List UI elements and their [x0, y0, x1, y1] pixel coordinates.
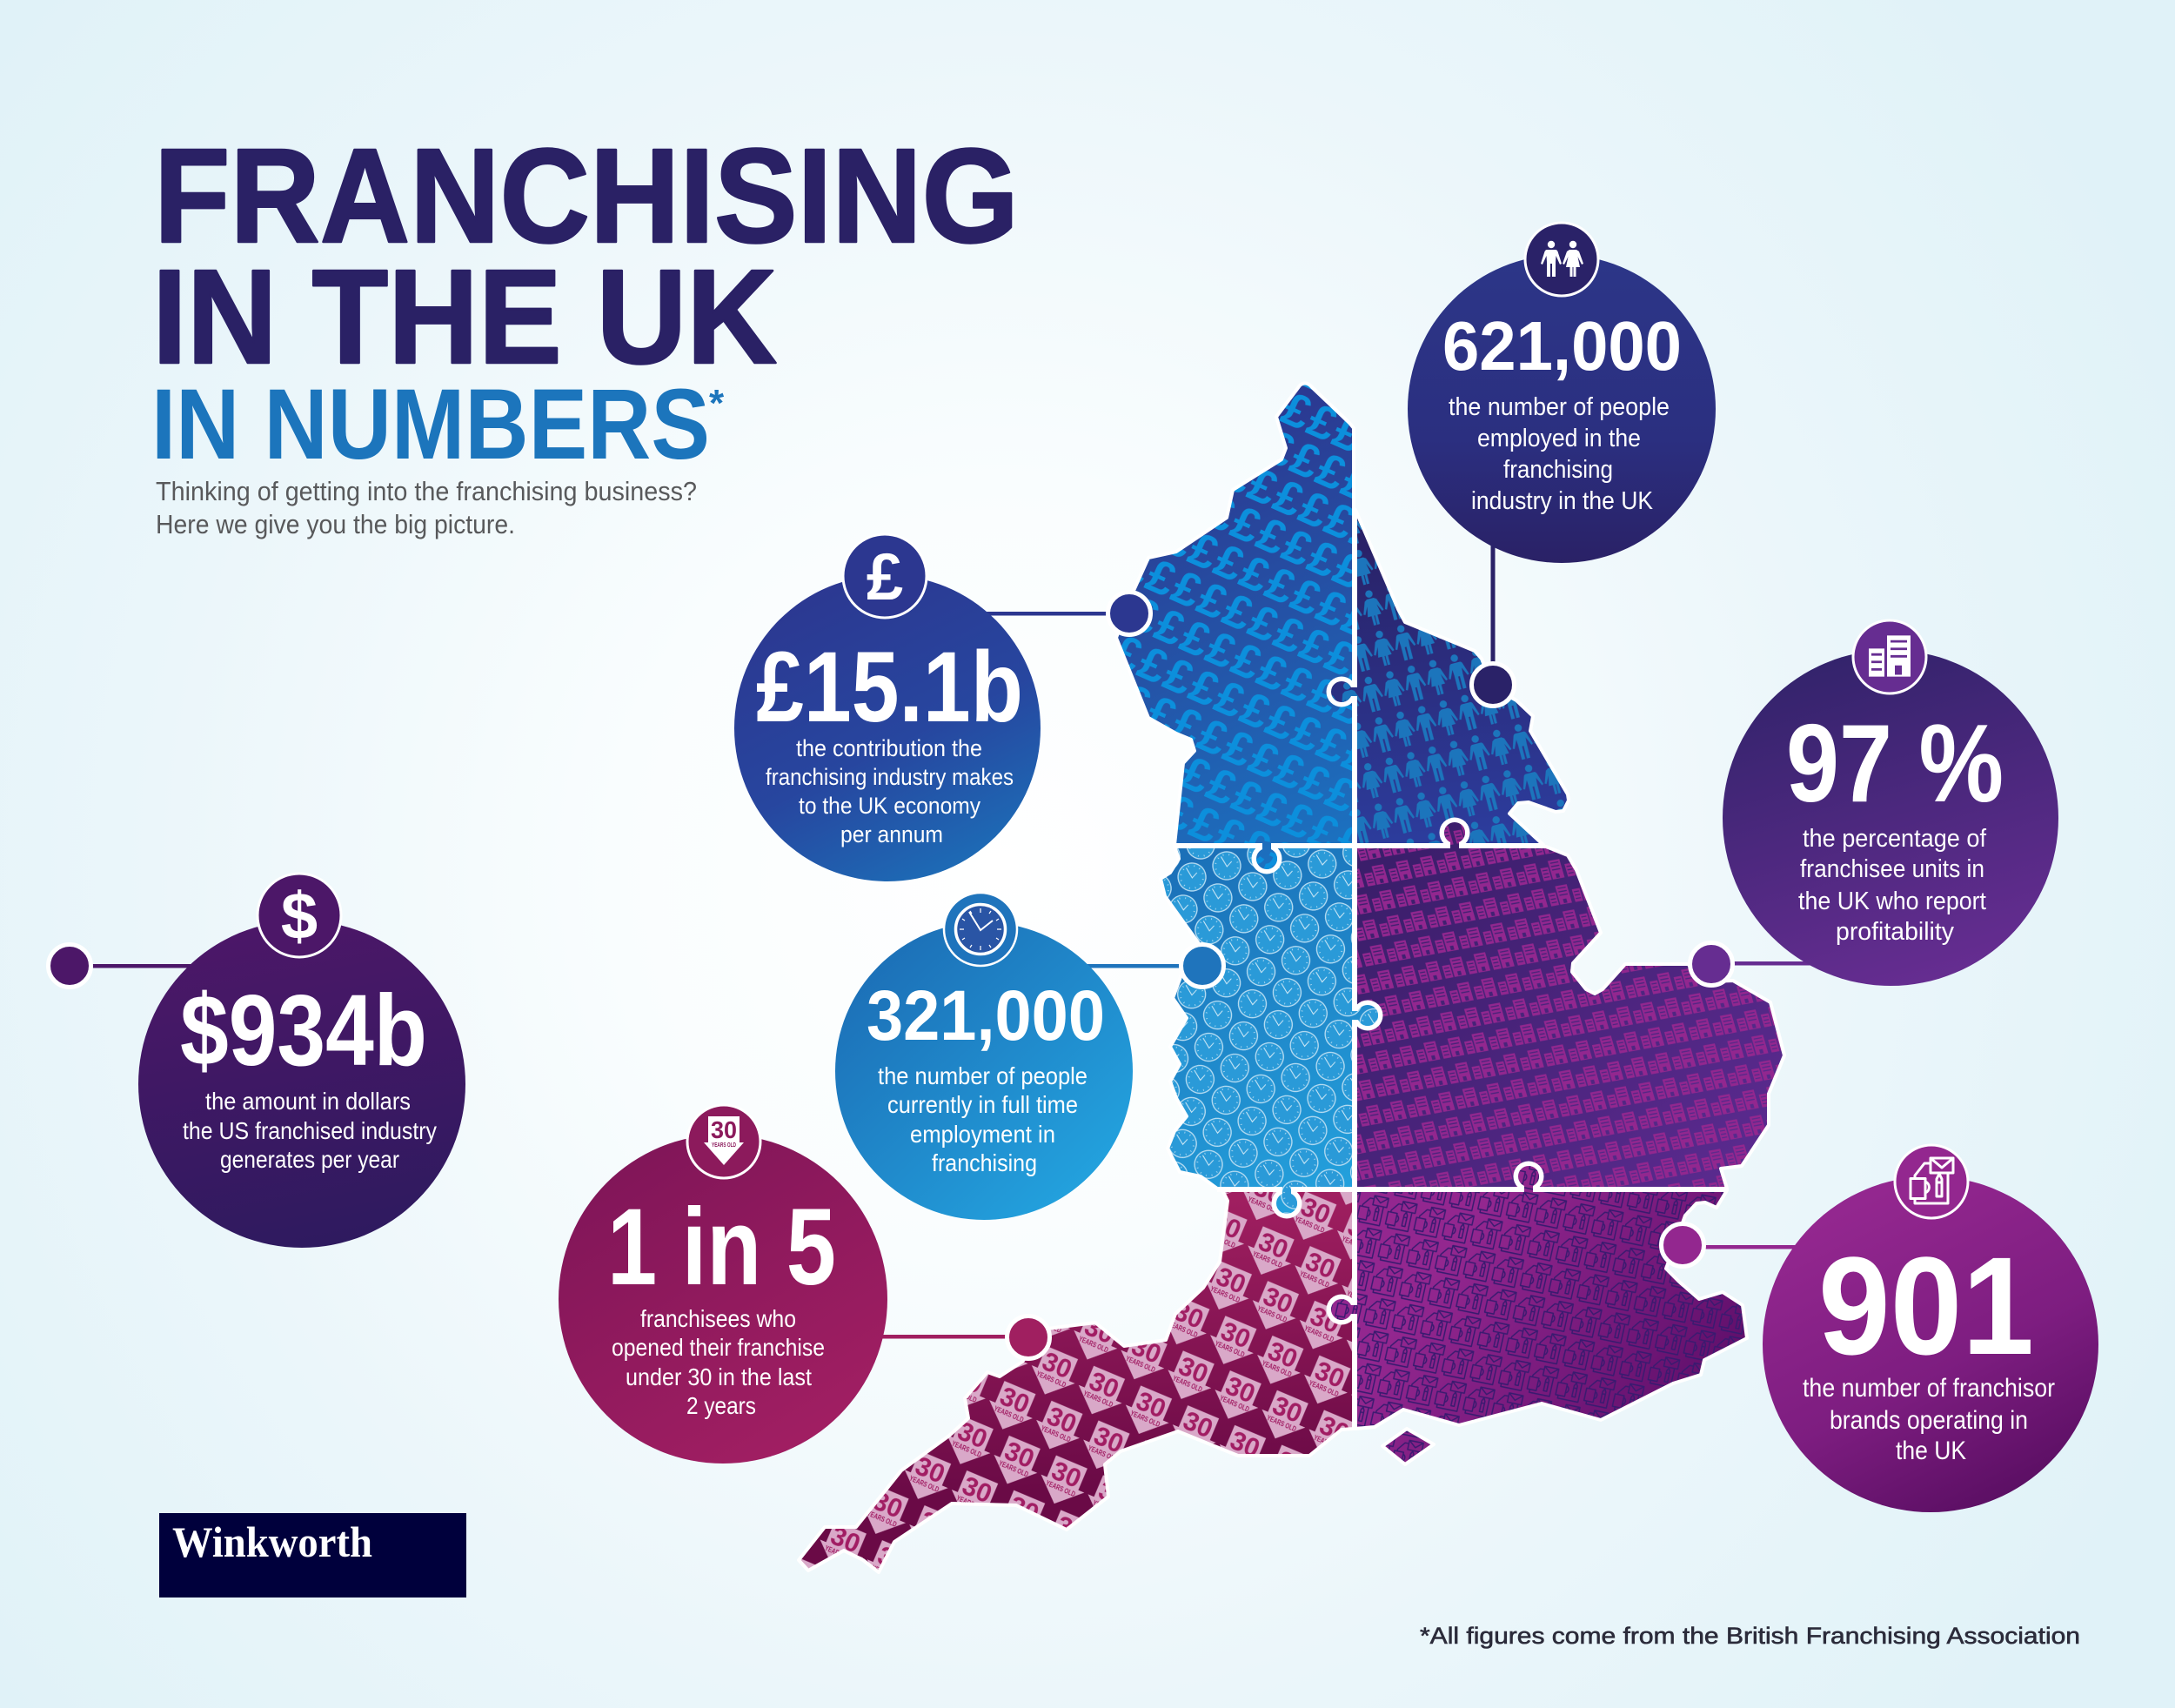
panel: £15.1b: [734, 534, 1041, 881]
logo: Winkworth: [159, 1513, 466, 1597]
intro text: Here we give you the big picture.: [156, 509, 515, 539]
icon: office supplies: [1895, 1145, 1968, 1218]
description: the percentage of: [1803, 825, 1987, 853]
description: franchising: [932, 1149, 1037, 1176]
description: the number of people: [1449, 393, 1670, 421]
description: [1803, 1374, 2055, 1465]
icon: clock: [944, 893, 1017, 966]
intro text: Thinking of getting into the franchising business?: [156, 476, 697, 506]
description: [766, 735, 1014, 847]
description: brands operating in: [1830, 1406, 2028, 1435]
description: franchising: [1503, 456, 1613, 484]
description: the UK who report: [1798, 887, 1986, 915]
map piece: north east, people: [1355, 510, 1569, 845]
description: the amount in dollars: [205, 1088, 411, 1115]
connector: 621,000: [1472, 539, 1514, 707]
panel: 1 in 5: [559, 1105, 887, 1464]
figure: 901: [1818, 1228, 2034, 1383]
icon: pound: £: [867, 540, 903, 614]
description: [878, 1062, 1088, 1176]
connector: 901: [1662, 1223, 1813, 1267]
icon: people: [1525, 223, 1598, 296]
icon: 30 years old arrow: 30: [711, 1116, 737, 1143]
description: [612, 1305, 825, 1419]
description: currently in full time: [887, 1091, 1078, 1118]
description: generates per year: [220, 1146, 399, 1173]
figure: $934b: [180, 974, 427, 1087]
description: the number of franchisor: [1803, 1374, 2055, 1403]
subtitle: in numbers: *: [709, 382, 725, 425]
description: the contribution the: [796, 735, 982, 761]
panel: 621,000: [1408, 223, 1716, 563]
connector: £15.1b: [983, 592, 1150, 635]
intro text: [156, 476, 697, 539]
logo: Winkworth: Winkworth: [172, 1517, 372, 1566]
panel: $934b: [138, 874, 465, 1248]
map of England and Wales as jigsaw: [799, 383, 1784, 1572]
description: the number of people: [878, 1062, 1088, 1089]
panel: 97%: [1723, 620, 2058, 986]
icon: 30 years old arrow: [687, 1105, 760, 1178]
description: franchisees who: [640, 1305, 796, 1332]
subtitle: in numbers: IN NUMBERS: [151, 369, 710, 480]
title: [152, 121, 1019, 392]
description: employed in the: [1477, 425, 1641, 452]
description: franchisee units in: [1800, 855, 1984, 883]
title: FRANCHISING: [154, 121, 1019, 271]
connector: 1 in 5: [879, 1316, 1049, 1359]
connector: 97%: [1690, 943, 1824, 985]
map piece: north, pounds: [1116, 383, 1354, 845]
connector: $934b: [49, 945, 200, 987]
description: franchising industry makes: [766, 764, 1014, 790]
map piece: south east, office items: [1355, 1190, 1747, 1464]
description: industry in the UK: [1471, 487, 1654, 515]
map piece: south west, 30 years old arrows: [799, 1190, 1354, 1572]
icon: dollar: $: [281, 880, 318, 954]
title: IN THE UK: [152, 242, 777, 392]
figure: 621,000: [1442, 307, 1682, 385]
description: [183, 1088, 437, 1173]
figure: 97 %: [1786, 701, 2004, 825]
jigsaw knobs: [1251, 677, 1543, 1324]
panel: 321,000: [835, 893, 1133, 1220]
description: 2 years: [686, 1392, 756, 1419]
description: per annum: [840, 821, 943, 847]
figure: £15.1b: [756, 632, 1023, 743]
icon: 30 years old arrow: YEARS OLD: [712, 1142, 736, 1149]
description: employment in: [910, 1121, 1055, 1148]
description: [1798, 825, 1987, 946]
map piece: midlands, buildings: [1355, 847, 1784, 1189]
connector: 321,000: [1079, 945, 1223, 987]
description: [1449, 393, 1670, 515]
icon: office building: [1853, 620, 1926, 693]
description: the US franchised industry: [183, 1117, 437, 1144]
description: the UK: [1896, 1437, 1966, 1465]
description: opened their franchise: [612, 1334, 825, 1361]
description: under 30 in the last: [626, 1363, 812, 1390]
footnote: *All figures come from the British Franchising Association: [1420, 1623, 2080, 1649]
description: to the UK economy: [799, 793, 980, 819]
icon: pound: [843, 534, 927, 618]
icon: dollar: [258, 874, 341, 957]
map piece: west, clocks: [1161, 847, 1354, 1189]
figure: 321,000: [867, 976, 1105, 1055]
figure: 1 in 5: [607, 1187, 836, 1308]
description: profitability: [1836, 918, 1954, 946]
panel: 901: [1763, 1145, 2098, 1512]
